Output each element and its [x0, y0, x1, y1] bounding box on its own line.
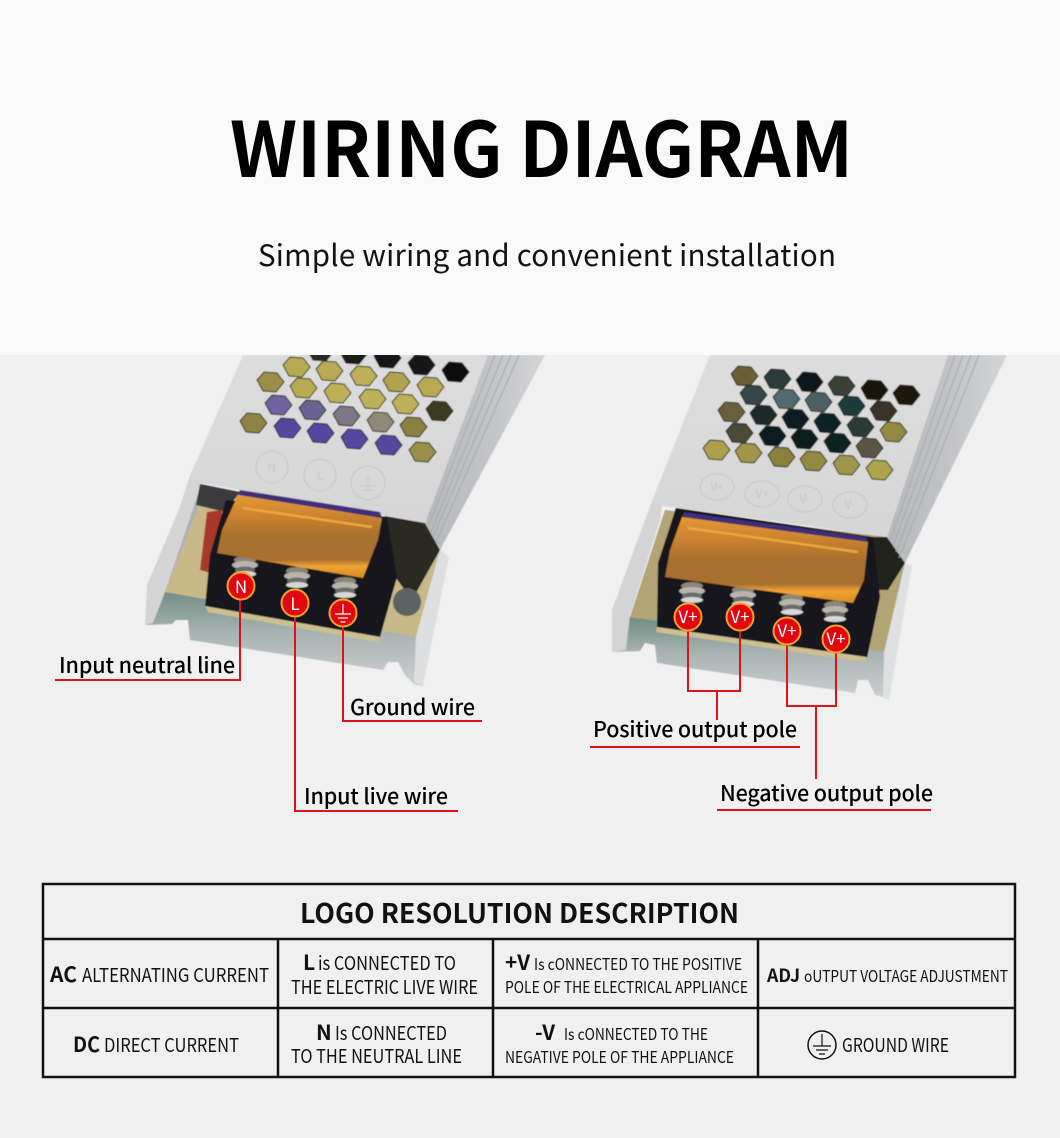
cell: +V: Is cONNECTED TO THE POSITIVE: [534, 951, 742, 975]
label: input neutral line: Input neutral line: [59, 649, 235, 680]
label: ground wire: Ground wire: [350, 691, 475, 722]
ventilation holes: [240, 341, 469, 462]
cell: N: N: [316, 1017, 332, 1047]
cell: L: L: [303, 947, 315, 977]
badge: V+ 4: V+: [826, 625, 846, 650]
callout lines: left product: [55, 598, 482, 811]
cell: N: [291, 1017, 462, 1069]
cell: -V: NEGATIVE POLE OF THE APPLIANCE: [505, 1044, 734, 1068]
callout lines: right product: [590, 630, 931, 810]
badge: L: L: [290, 590, 300, 615]
cell: -V: [505, 1017, 734, 1068]
black terminal block: [205, 500, 397, 637]
embossed markings N L ground: [256, 451, 385, 500]
cell: ground wire: [808, 1031, 949, 1059]
embossed markings V+ V+ V- V-: V-: [845, 496, 855, 513]
bolt on pcb: [393, 588, 421, 616]
right lower wall: [414, 550, 449, 686]
ribbed side face: [887, 355, 1007, 563]
badge: V+ 1: [674, 603, 702, 630]
label: positive output pole: Positive output pole: [593, 713, 797, 744]
bottom plate: [612, 617, 887, 698]
bottom plate: [146, 590, 422, 686]
badge: N: [228, 572, 254, 600]
embossed markings V+ V+ V- V-: V-: [800, 490, 810, 507]
black terminal block: [657, 508, 880, 658]
pcb interior: [630, 510, 905, 652]
background: header band: [0, 0, 1060, 355]
top cover face: [652, 355, 948, 537]
icon: ground symbol: [808, 1031, 836, 1059]
screws: [232, 556, 358, 598]
orange terminal cover: [217, 495, 382, 578]
cell: AC: ALTERNATING CURRENT: [82, 961, 269, 988]
cell: +V: [505, 947, 748, 998]
cell: N: TO THE NEUTRAL LINE: [291, 1042, 462, 1069]
cell: ground wire: GROUND WIRE: [842, 1031, 949, 1058]
cell: L: THE ELECTRIC LIVE WIRE: [291, 973, 478, 1000]
table: logo resolution description: [43, 884, 1015, 1077]
shadow under cover, left end: [196, 484, 240, 512]
cell: DC: [73, 1029, 239, 1059]
shadowed board corner: [870, 537, 905, 590]
cell: DC: DIRECT CURRENT: [104, 1031, 239, 1058]
badge: L: [282, 590, 308, 616]
badge: V+ 3: [774, 617, 800, 644]
badge: ground: [330, 600, 356, 626]
top cover face: [189, 355, 488, 523]
table heading: LOGO RESOLUTION DESCRIPTION: [300, 892, 739, 931]
ribbed side face: [425, 355, 545, 550]
pcb interior: [165, 490, 440, 637]
purple strip above cover: [238, 490, 382, 518]
title: WIRING DIAGRAM: [230, 89, 853, 199]
label: negative output pole: Negative output pole: [720, 777, 933, 808]
cell: L: [291, 947, 478, 1000]
badge: N: N: [235, 573, 247, 598]
product photo: left power supply, input terminals: [145, 341, 545, 686]
product photo: right power supply, output terminals: [612, 355, 1007, 700]
badge: V+ 4: [822, 625, 850, 652]
embossed markings N L ground: L: [317, 467, 324, 484]
cell: ADJ: [766, 962, 1008, 988]
cell: N: Is CONNECTED: [335, 1019, 447, 1046]
shadowed board corner: [385, 516, 440, 600]
subtitle: Simple wiring and convenient installation: [258, 233, 836, 275]
badge: V+ 3: V+: [777, 617, 797, 642]
cell: ADJ: oUTPUT VOLTAGE ADJUSTMENT: [804, 963, 1008, 987]
purple strip above cover: [682, 512, 868, 542]
table grid: [43, 884, 1015, 1077]
cell: +V: +V: [505, 947, 531, 977]
cell: AC: [49, 959, 269, 989]
embossed markings V+ V+ V- V-: V+: [755, 485, 769, 502]
screws: [679, 582, 848, 622]
label: input live wire: Input live wire: [304, 780, 448, 811]
right lower wall: [883, 563, 912, 700]
cell: L: is CONNECTED TO: [318, 949, 456, 976]
cell: DC: DC: [73, 1029, 100, 1059]
left wall: [612, 501, 662, 652]
badge: V+ 1: V+: [678, 603, 698, 628]
cell: -V: -V: [535, 1017, 556, 1047]
cell: +V: POLE OF THE ELECTRICAL APPLIANCE: [505, 974, 748, 998]
ventilation holes: [703, 366, 920, 480]
badge: V+ 2: [726, 603, 754, 630]
embossed markings N L ground: N: [268, 459, 276, 476]
cell: ADJ: ADJ: [766, 962, 800, 988]
cell: AC: AC: [49, 959, 77, 989]
embossed markings V+ V+ V- V-: V+: [710, 478, 724, 495]
cell: -V: Is cONNECTED TO THE: [564, 1021, 708, 1045]
left wall: [145, 478, 200, 625]
red component: [200, 510, 222, 575]
badge: V+ 2: V+: [730, 603, 750, 628]
orange terminal cover: [665, 517, 868, 603]
embossed markings V+ V+ V- V-: [700, 474, 867, 518]
